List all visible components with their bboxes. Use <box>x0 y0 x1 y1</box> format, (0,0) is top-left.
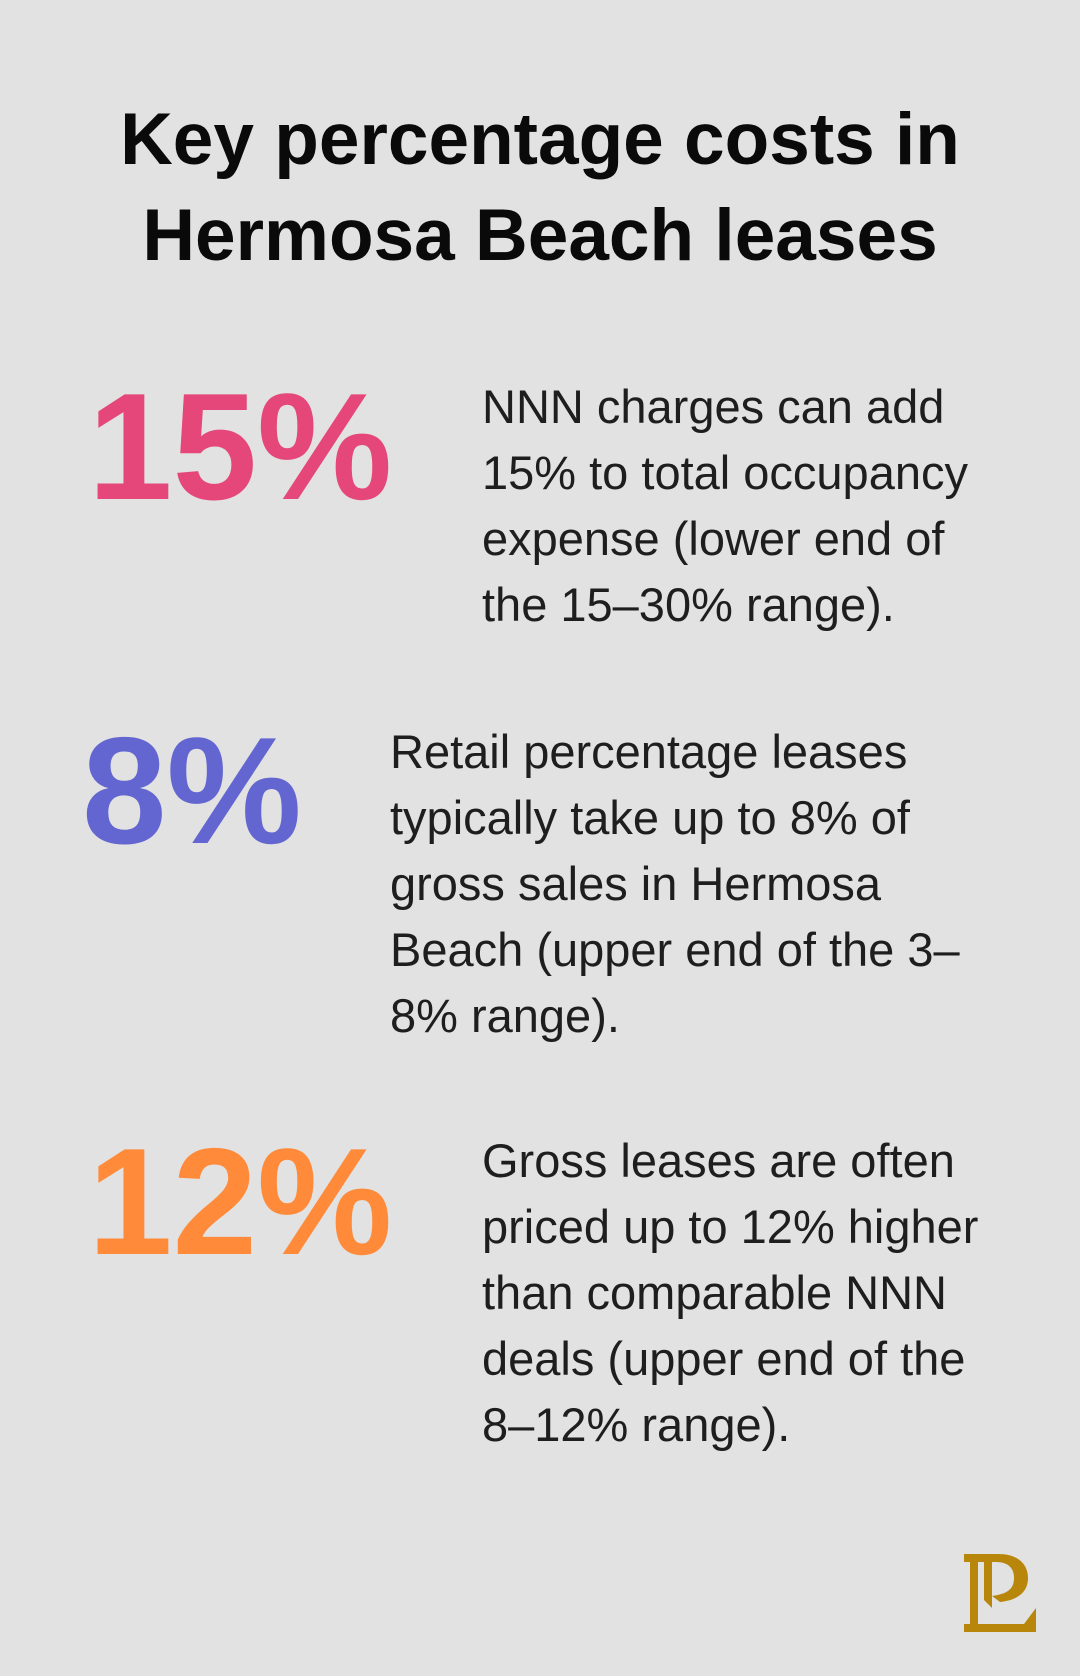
text: gross leases: Gross leases are often <box>482 1134 955 1187</box>
title <box>120 99 960 276</box>
text: NNN charges <box>482 380 968 631</box>
stat: 12%: 12% <box>88 1117 392 1287</box>
text: retail percentage leases <box>390 725 960 1042</box>
title: Hermosa Beach leases <box>142 195 938 276</box>
text: gross leases: than comparable NNN <box>482 1266 947 1319</box>
stat: 8%: 8% <box>82 706 302 876</box>
text: NNN charges: 15% to total occupancy <box>482 446 968 499</box>
text: retail percentage leases: gross sales in Hermosa <box>390 857 881 910</box>
text: retail percentage leases: typically take up to 8% of <box>390 791 910 844</box>
title: Key percentage costs in <box>120 99 960 180</box>
text: NNN charges: the 15–30% range). <box>482 578 895 631</box>
stat: 15%: 15% <box>88 362 392 532</box>
text: retail percentage leases: Retail percentage leases <box>390 725 907 778</box>
text: NNN charges: expense (lower end of <box>482 512 944 565</box>
text: NNN charges: NNN charges can add <box>482 380 944 433</box>
text: gross leases: 8–12% range). <box>482 1398 790 1451</box>
text: gross leases <box>482 1134 978 1451</box>
logo <box>964 1554 1036 1632</box>
text: gross leases: priced up to 12% higher <box>482 1200 978 1253</box>
text: gross leases: deals (upper end of the <box>482 1332 965 1385</box>
text: retail percentage leases: 8% range). <box>390 989 620 1042</box>
text: retail percentage leases: Beach (upper end of the 3– <box>390 923 960 976</box>
